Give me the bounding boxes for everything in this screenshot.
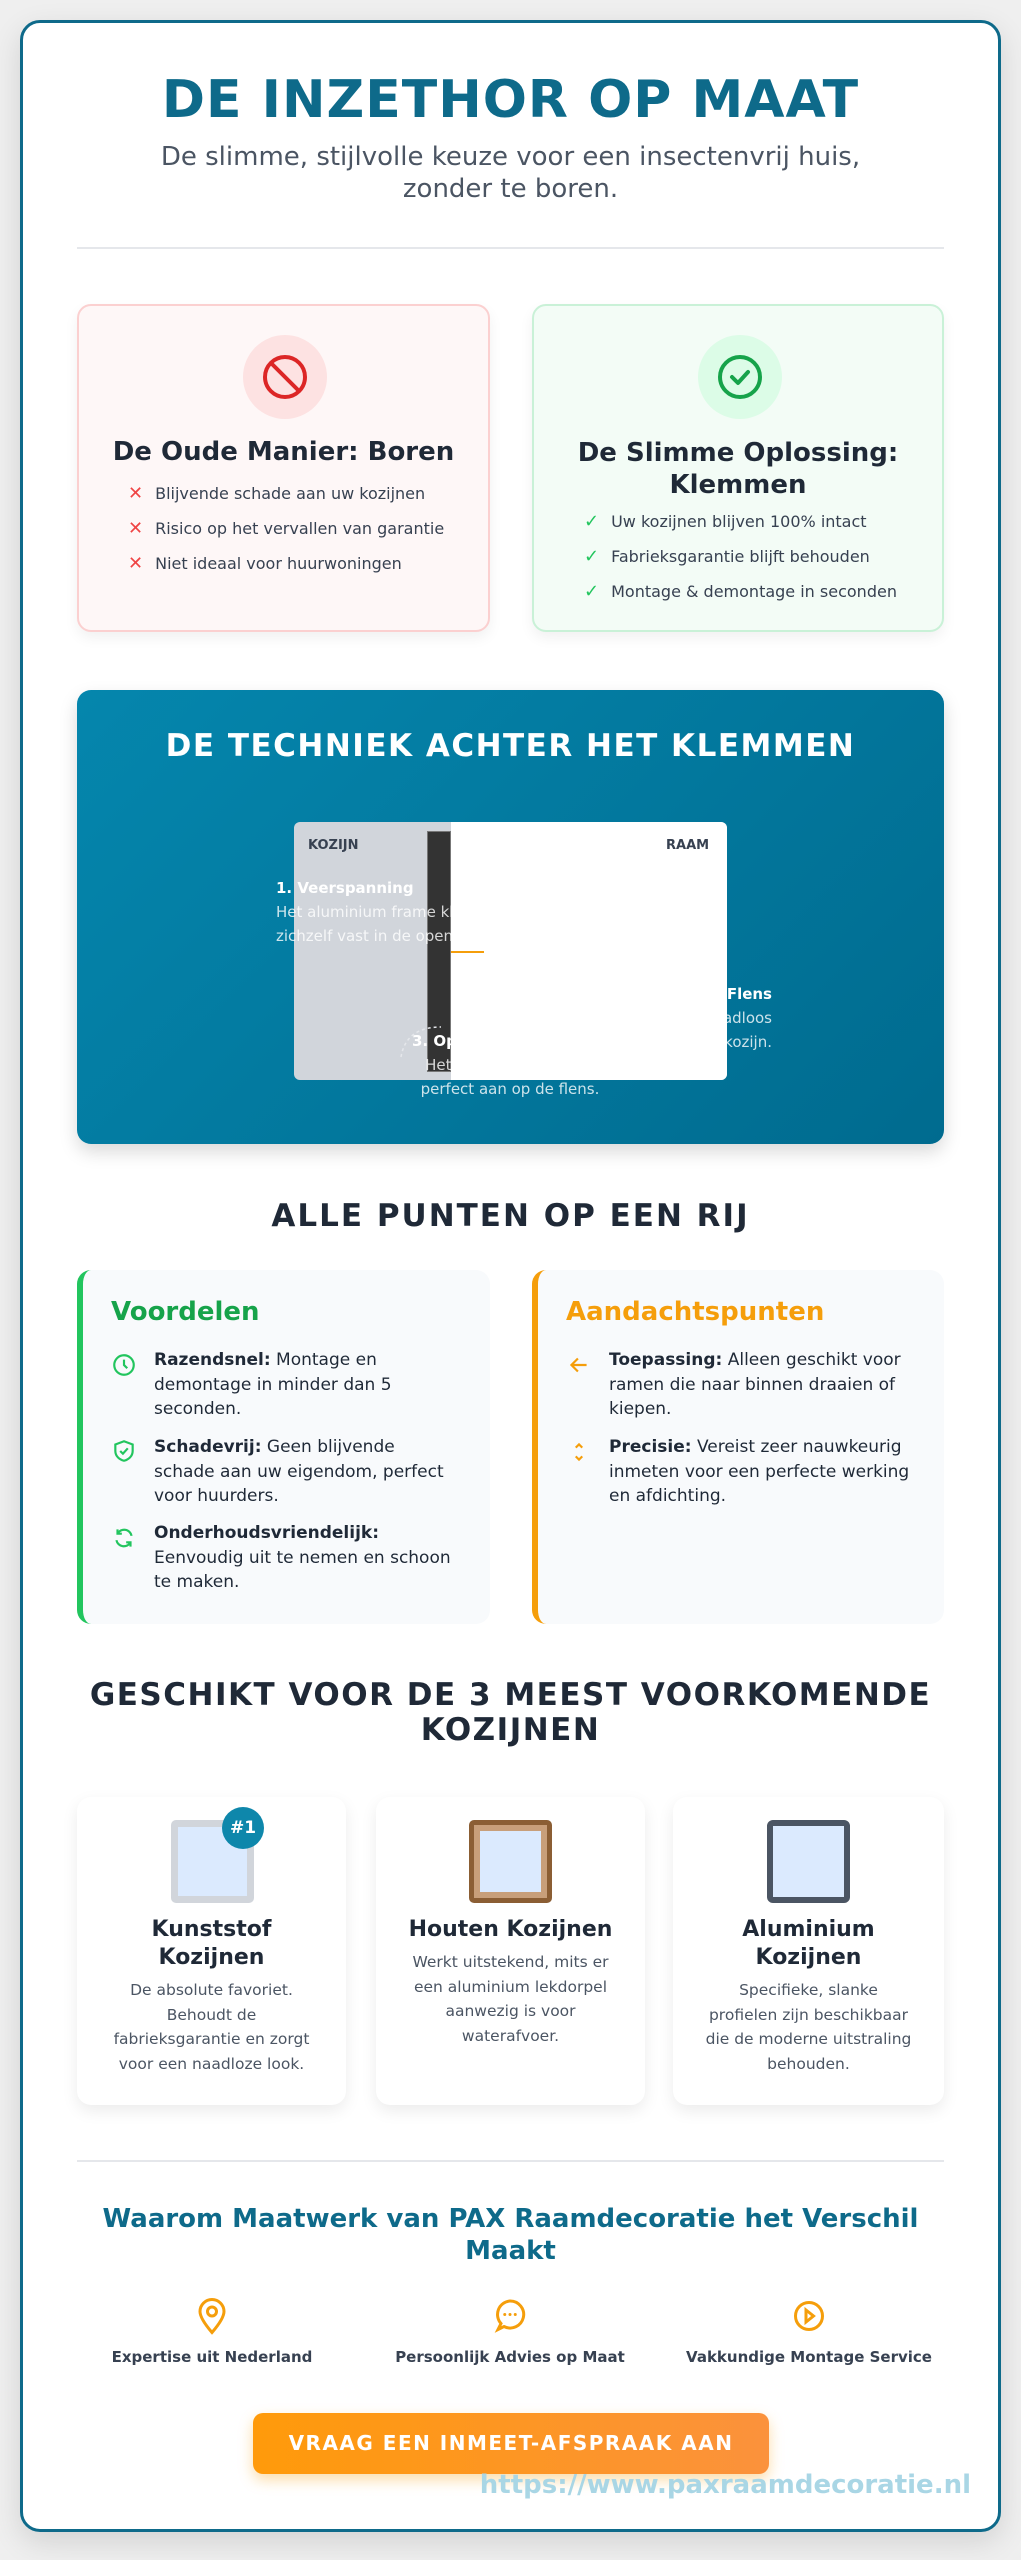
heading: Kozijnen [756, 1945, 861, 1970]
text: step 1 [276, 879, 483, 945]
item: schadevrij [114, 1437, 444, 1506]
diagram: clamp cross-section: perfect aan op de flens. [421, 1080, 599, 1098]
diagram: clamp cross-section [276, 822, 772, 1098]
subtitle: De slimme, stijlvolle keuze voor een insectenvrij huis, zonder te boren. [161, 142, 860, 204]
heading: geschikt: GESCHIKT VOOR DE 3 MEEST VOORKOMENDE KOZIJNEN [90, 1677, 931, 1748]
item: toepassing: Toepassing: Alleen geschikt voor ramen die naar binnen draaien of kiepen. [609, 1350, 901, 1419]
feature: expertise: Expertise uit Nederland [112, 2348, 312, 2366]
icon: wooden window [469, 1820, 552, 1903]
button: CTA: VRAAG EEN INMEET-AFSPRAAK AAN [289, 2431, 733, 2455]
description: Werkt uitstekend, mits er een aluminium lekdorpel aanwezig is voor waterafvoer. [412, 1953, 609, 2044]
card: aluminium [673, 1797, 944, 2105]
item: schadevrij: schade aan uw eigendom, perfect voor huurders. [154, 1462, 444, 1506]
heading [152, 1917, 272, 1970]
text: step 2: 2. Rust op de Flens [610, 985, 772, 1003]
description: De absolute favoriet. Behoudt de fabrieksgarantie en zorgt voor een naadloze look. [114, 1981, 309, 2072]
list: benefits [584, 511, 897, 602]
text: step 3: 3. Optimale Afdichting [412, 1032, 603, 1050]
heading: Kunststof [152, 1917, 271, 1942]
heading: Aandachtspunten [566, 1297, 824, 1327]
item: precisie: en afdichting. [609, 1486, 726, 1506]
text: step 2: Het frame sluit naadloos [588, 1009, 772, 1027]
item: precisie [575, 1437, 909, 1506]
icon: white window with #1 badge [171, 1820, 254, 1903]
list: benefits: ✓ Montage & demontage in seconden [584, 581, 897, 602]
heading: Aluminium [742, 1917, 875, 1942]
text: step 1: Het aluminium frame klemt [276, 903, 483, 921]
button: CTA [253, 2413, 769, 2474]
feature: advies: Persoonlijk Advies op Maat [395, 2348, 625, 2366]
item: precisie: Precisie: Vereist zeer nauwkeurig inmeten voor een perfecte werking [609, 1437, 909, 1482]
icon: aluminium window [767, 1820, 850, 1903]
heading: Kozijnen [159, 1945, 264, 1970]
url watermark: https://www.paxraamdecoratie.nl [480, 2470, 971, 2500]
heading: waarom PAX: Waarom Maatwerk van PAX Raamdecoratie het Verschil Maakt [103, 2204, 918, 2266]
heading [742, 1917, 875, 1970]
heading: De Slimme Oplossing: [578, 438, 898, 468]
label: kozijn: KOZIJN [308, 838, 359, 853]
feature: montage: Vakkundige Montage Service [686, 2348, 932, 2366]
title: DE INZETHOR OP MAAT [162, 70, 859, 130]
feature: advies [395, 2300, 625, 2366]
list: drawbacks: ✕ Risico op het vervallen van garantie [128, 518, 444, 539]
item: onderhoudsvriendelijk: Eenvoudig uit te nemen en schoon te maken. [154, 1548, 451, 1592]
heading: Voordelen [111, 1297, 260, 1327]
panel: voordelen [77, 1270, 490, 1624]
text: step 1: 1. Veerspanning [276, 879, 414, 897]
item: razendsnel: Razendsnel: Montage en demontage in minder dan 5 seconden. [154, 1350, 392, 1419]
item: onderhoudsvriendelijk [115, 1523, 451, 1592]
feature: montage [686, 2301, 932, 2366]
list: benefits: ✓ Uw kozijnen blijven 100% intact [584, 511, 867, 532]
icon: forbidden [243, 335, 327, 419]
feature: expertise [112, 2298, 312, 2366]
description: Specifieke, slanke profielen zijn beschikbaar die de moderne uitstraling behouden. [706, 1981, 911, 2072]
card: houten [376, 1797, 645, 2105]
list: benefits: ✓ Fabrieksgarantie blijft behouden [584, 546, 870, 567]
icon: check [698, 335, 782, 419]
panel: aandachtspunten [532, 1270, 944, 1624]
list: drawbacks: ✕ Niet ideaal voor huurwoningen [128, 553, 402, 574]
heading: DE TECHNIEK ACHTER HET KLEMMEN [166, 728, 855, 764]
heading [578, 438, 898, 500]
card: kunststof: #1 [230, 1818, 256, 1838]
heading: Klemmen [669, 470, 807, 500]
item: schadevrij: Schadevrij: Geen blijvende [154, 1437, 395, 1457]
list: drawbacks: ✕ Blijvende schade aan uw kozijnen [128, 483, 425, 504]
card: kunststof [77, 1797, 346, 2105]
text: step 1: zichzelf vast in de opening. [276, 927, 481, 945]
panel: old way drilling [77, 304, 490, 632]
panel: technique [77, 690, 944, 1144]
heading: alle punten: ALLE PUNTEN OP EEN RIJ [271, 1198, 750, 1234]
list: drawbacks [128, 483, 444, 574]
text: step 2 [588, 985, 772, 1051]
heading: Houten Kozijnen [409, 1917, 612, 1942]
diagram: clamp cross-section: Het rubber profiel sluit [425, 1056, 595, 1074]
panel: smart solution clamping [532, 304, 944, 632]
text: step 2: aan op het kozijn. [639, 1033, 772, 1051]
item: onderhoudsvriendelijk: Onderhoudsvriendelijk: [154, 1523, 379, 1543]
heading: De Oude Manier: Boren [113, 437, 454, 467]
label: raam: RAAM [666, 838, 709, 853]
